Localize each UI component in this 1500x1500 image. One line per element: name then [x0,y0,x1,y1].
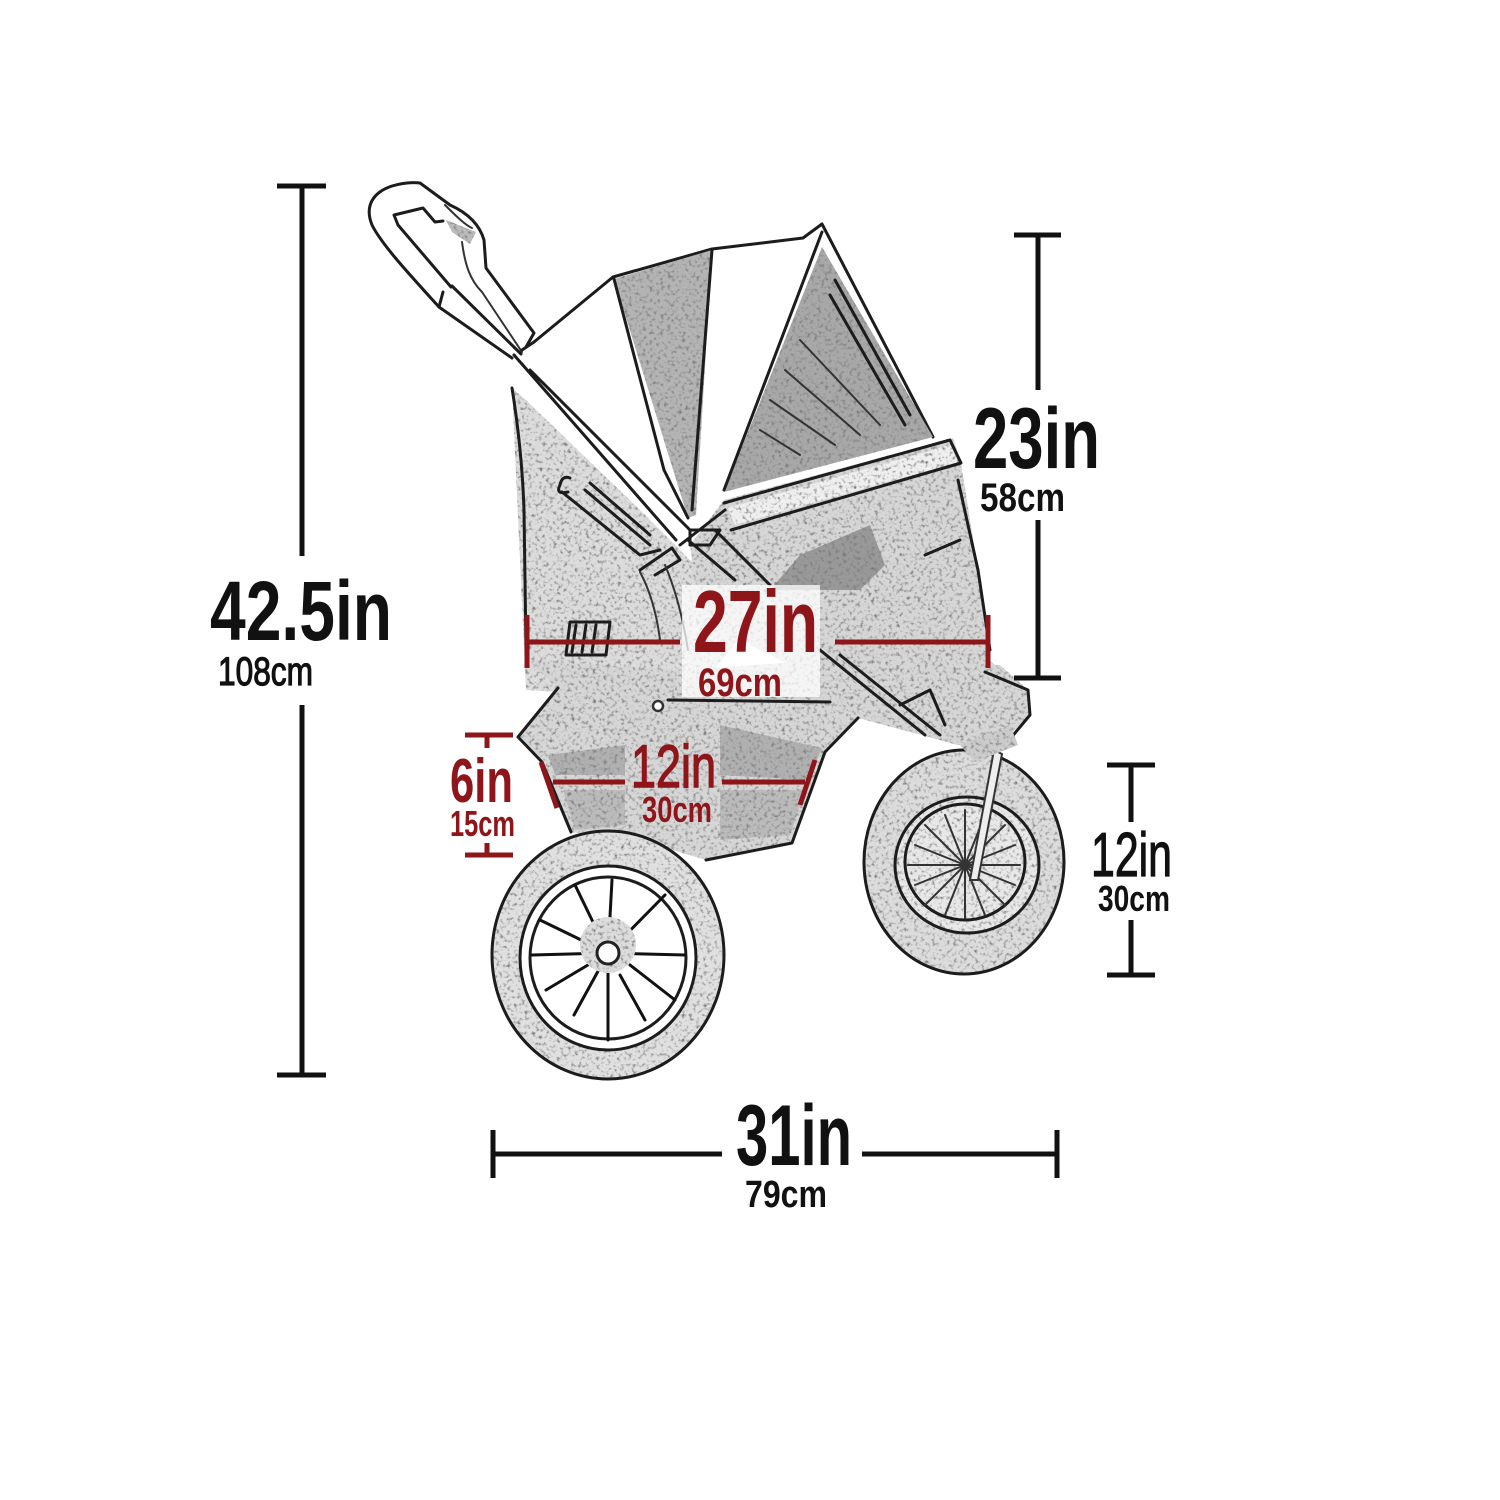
rear wheel [492,831,724,1079]
dimension: cabin length 27in [527,572,988,705]
dimension: basket width 12in [541,733,815,830]
rear body panel [512,355,770,700]
label: 42.5in: 42.5in [210,564,392,658]
label: 79cm: 79cm [745,1174,827,1216]
label: 23in: 23in [973,391,1100,487]
basket and chassis [518,650,1030,860]
front seat band and cabin [680,438,1020,700]
label: 27in: 27in [693,572,818,671]
label: 12in: 12in [1091,821,1172,890]
front wheel spokes [908,810,1020,918]
canopy mesh window [724,247,933,492]
white label plate [682,585,820,697]
stroller illustration [369,183,1064,1079]
label: 12in red: 12in [631,733,716,800]
label: 30cm: 30cm [1098,878,1170,919]
front wheel [864,725,1064,974]
dimension: wheel diameter 12in [1091,765,1172,975]
label: 108cm: 108cm [218,650,313,694]
label: 58cm: 58cm [980,476,1065,520]
canopy grey gore [614,250,712,518]
label: 6in: 6in [450,747,513,816]
dimension: overall height 42.5in [210,186,392,1075]
label: 30cm red: 30cm [642,789,712,830]
front fork [970,750,1002,880]
label: 69cm: 69cm [698,661,782,705]
dimension: cabin height 23in [973,235,1100,678]
dimension: overall length 31in [493,1088,1057,1216]
rear wheel spokes [532,880,685,1040]
stroller handle [369,183,534,358]
label: 31in: 31in [736,1088,852,1184]
label: 15cm: 15cm [450,803,515,844]
canopy [522,224,933,518]
dimension: basket height 6in [450,735,515,855]
